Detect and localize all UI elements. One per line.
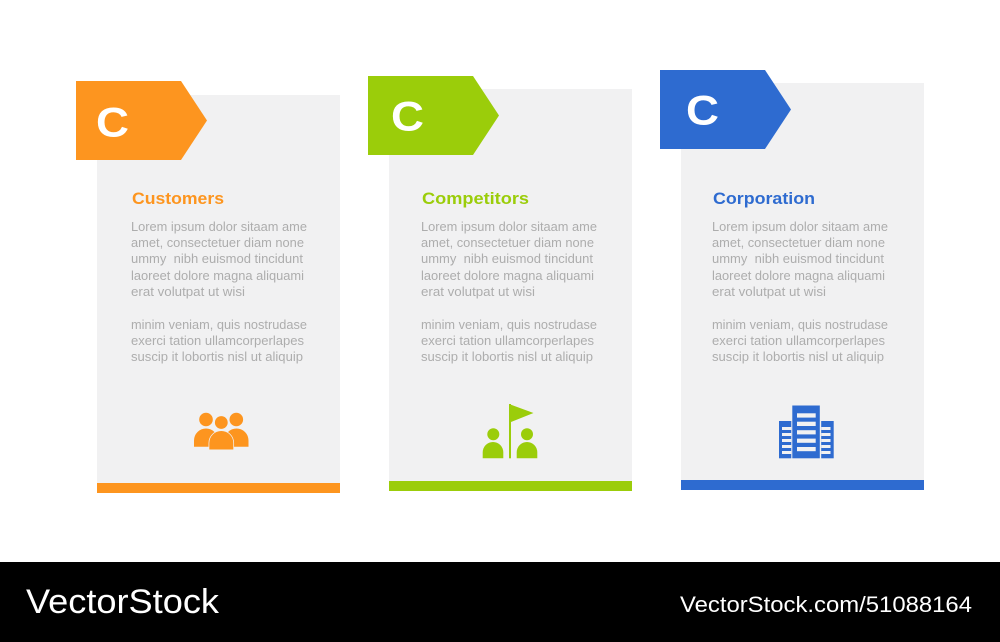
footer url text: VectorStock.com/51088164 bbox=[680, 592, 972, 617]
footer band bbox=[0, 562, 1000, 642]
text block: competitors: laoreet dolore magna aliquami bbox=[421, 268, 594, 283]
card background: corporation bbox=[681, 83, 924, 490]
arrow tag: corporation: C bbox=[686, 86, 719, 134]
heading: competitors: Competitors bbox=[422, 190, 529, 208]
text block: competitors: Lorem ipsum dolor sitaam ame bbox=[421, 219, 597, 234]
arrow tag: competitors bbox=[368, 76, 499, 155]
text block: competitors: erat volutpat ut wisi bbox=[421, 284, 535, 299]
heading: customers: Customers bbox=[132, 190, 224, 208]
bottom bar: competitors bbox=[389, 481, 632, 491]
text block: competitors bbox=[421, 219, 597, 364]
text block: competitors: suscip it lobortis nisl ut aliquip bbox=[421, 349, 593, 364]
panel: customers bbox=[76, 81, 340, 493]
icon: office buildings bbox=[779, 406, 834, 458]
text block: corporation: ummy nibh euismod tincidunt bbox=[712, 251, 884, 266]
text block: corporation: exerci tation ullamcorperlapes bbox=[712, 333, 885, 348]
text block: corporation: Lorem ipsum dolor sitaam ame bbox=[712, 219, 888, 234]
text block: competitors: exerci tation ullamcorperlapes bbox=[421, 333, 594, 348]
arrow tag: corporation bbox=[660, 70, 791, 149]
text block: customers: laoreet dolore magna aliquami bbox=[131, 268, 304, 283]
arrow tag: competitors: C bbox=[391, 92, 424, 140]
card background: competitors bbox=[389, 89, 632, 491]
icon: two people and flag bbox=[483, 404, 537, 458]
text block: customers: suscip it lobortis nisl ut aliquip bbox=[131, 349, 303, 364]
text block: competitors: ummy nibh euismod tincidunt bbox=[421, 251, 593, 266]
text block: customers: ummy nibh euismod tincidunt bbox=[131, 251, 303, 266]
text block: corporation bbox=[712, 219, 888, 364]
text block: corporation: minim veniam, quis nostrudase bbox=[712, 317, 888, 332]
arrow tag: customers bbox=[76, 81, 207, 160]
text block: customers bbox=[131, 219, 307, 364]
text block: corporation: amet, consectetuer diam none bbox=[712, 235, 885, 250]
text block: customers: exerci tation ullamcorperlapes bbox=[131, 333, 304, 348]
arrow tag: customers: C bbox=[96, 98, 129, 146]
text block: corporation: erat volutpat ut wisi bbox=[712, 284, 826, 299]
footer logo text: VectorStock bbox=[26, 583, 220, 621]
text block: competitors: minim veniam, quis nostrudase bbox=[421, 317, 597, 332]
heading: corporation: Corporation bbox=[713, 190, 815, 208]
panel: competitors bbox=[368, 76, 632, 491]
text block: customers: amet, consectetuer diam none bbox=[131, 235, 304, 250]
panel: corporation bbox=[660, 70, 924, 490]
text block: customers: minim veniam, quis nostrudase bbox=[131, 317, 307, 332]
text block: customers: erat volutpat ut wisi bbox=[131, 284, 245, 299]
text block: corporation: suscip it lobortis nisl ut aliquip bbox=[712, 349, 884, 364]
text block: customers: Lorem ipsum dolor sitaam ame bbox=[131, 219, 307, 234]
bottom bar: customers bbox=[97, 483, 340, 493]
text block: corporation: laoreet dolore magna aliquami bbox=[712, 268, 885, 283]
icon: people group bbox=[194, 413, 248, 450]
text block: competitors: amet, consectetuer diam none bbox=[421, 235, 594, 250]
bottom bar: corporation bbox=[681, 480, 924, 490]
card background: customers bbox=[97, 95, 340, 493]
